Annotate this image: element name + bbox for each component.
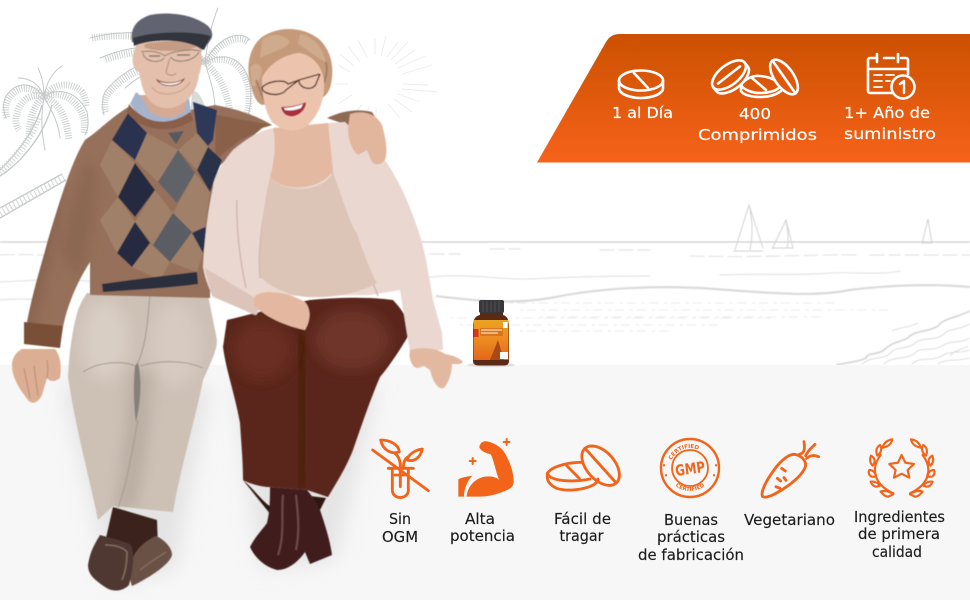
feature: Alta potencia — [450, 439, 515, 545]
label: 1+ Año de suministro — [844, 104, 936, 143]
icon: left palm tree — [0, 66, 88, 218]
man's glasses — [141, 50, 201, 61]
label: 400 Comprimidos: 400 — [739, 105, 771, 123]
man's flat cap — [132, 13, 212, 50]
woman's top — [260, 173, 377, 297]
man's left hand on ledge — [12, 349, 61, 403]
icon: sun sketch — [335, 36, 438, 122]
woman's right hand on ledge — [409, 348, 463, 388]
label: Buenas prácticas de fabricación: prácticas — [657, 528, 725, 546]
icon: multiple tablets — [707, 55, 803, 99]
photo: senior couple seated on ledge — [12, 13, 463, 591]
woman's neck and chest — [270, 123, 333, 187]
man's sweater — [20, 105, 272, 348]
man — [12, 13, 378, 591]
icon: laurel wreath with star — [869, 439, 935, 497]
woman's trousers — [223, 298, 410, 520]
label: Alta potencia: potencia — [450, 527, 515, 545]
woman's clasped hands — [254, 292, 310, 330]
man's smile — [157, 79, 184, 86]
man's face — [133, 41, 202, 108]
man's shoes — [130, 536, 172, 586]
label: Fácil de tragar — [554, 510, 611, 545]
wall ledge — [0, 365, 970, 600]
icon: carrot — [762, 442, 819, 497]
icon: GMP certified stamp: GMP — [674, 458, 706, 480]
icon: flexed arm — [458, 439, 514, 497]
label: 400 Comprimidos: Comprimidos — [698, 126, 817, 144]
man's trousers — [68, 290, 217, 520]
label: Ingredientes de primera calidad: Ingredientes — [854, 508, 945, 526]
label: Sin OGM — [382, 510, 418, 546]
man's sweater neckband — [127, 104, 193, 129]
feature: Fácil de tragar — [547, 439, 627, 545]
icon: GMP certified stamp — [660, 438, 720, 498]
icon: GMP certified stamp: CERTIFIED — [676, 483, 704, 491]
man's socks — [106, 507, 158, 560]
panel: product features row — [371, 438, 945, 564]
icon: two tablets — [547, 439, 627, 492]
woman's boots — [250, 487, 332, 570]
label: Buenas prácticas de fabricación: Buenas — [664, 511, 718, 529]
label: Fácil de tragar: tragar — [560, 527, 604, 545]
product bottle — [467, 300, 515, 367]
label: Fácil de tragar: Fácil de — [554, 510, 611, 528]
label: Alta potencia: Alta — [465, 510, 495, 528]
label: Ingredientes de primera calidad: de primera — [858, 525, 940, 543]
label: Ingredientes de primera calidad: calidad — [872, 543, 922, 561]
label: Buenas prácticas de fabricación: de fabricación — [638, 546, 744, 564]
panel: orange benefits banner — [537, 34, 970, 162]
bottle label — [474, 320, 508, 360]
icon: palm tree behind man — [90, 8, 251, 124]
wall shadows — [62, 385, 378, 585]
feature: Buenas prácticas de fabricación — [638, 438, 744, 564]
label: 1 al Día: 1 al Día — [612, 104, 673, 122]
feature: Sin OGM — [373, 440, 428, 546]
label: Alta potencia — [450, 510, 515, 545]
label: Sin OGM: Sin — [389, 510, 411, 528]
icon: calendar with one — [868, 54, 914, 98]
woman's smile — [281, 102, 306, 116]
man's arm around woman — [327, 110, 378, 126]
label: Ingredientes de primera calidad — [854, 508, 945, 561]
woman's face — [262, 53, 324, 130]
woman — [203, 29, 463, 570]
label: Vegetariano: Vegetariano — [744, 511, 835, 529]
label: 1+ Año de suministro: suministro — [844, 125, 936, 143]
sea horizon and waves — [0, 242, 970, 331]
label: Sin OGM: OGM — [382, 528, 418, 546]
icon: GMP certified stamp: CERTIFIED — [668, 444, 699, 460]
feature: Vegetariano — [744, 442, 835, 529]
label: Buenas prácticas de fabricación — [638, 511, 744, 564]
man's hand on woman's shoulder — [348, 112, 386, 164]
icon: sailboats — [733, 205, 932, 251]
icon: non-GMO plant in tube — [373, 440, 428, 497]
bottle cap — [479, 300, 504, 313]
man's collar — [130, 92, 191, 125]
icon: coastal clouds sketch — [836, 311, 970, 365]
label: 400 Comprimidos — [698, 105, 817, 144]
woman's hair — [248, 29, 332, 105]
woman's glasses — [262, 74, 320, 94]
icon: single tablet — [619, 70, 663, 98]
label: 1+ Año de suministro: 1+ Año de — [844, 104, 930, 122]
sweater argyle diamonds — [102, 102, 222, 292]
woman's cardigan — [203, 122, 443, 352]
bottle body — [473, 312, 509, 366]
man's neck — [140, 95, 188, 117]
feature: Ingredientes de primera calidad — [854, 439, 945, 561]
